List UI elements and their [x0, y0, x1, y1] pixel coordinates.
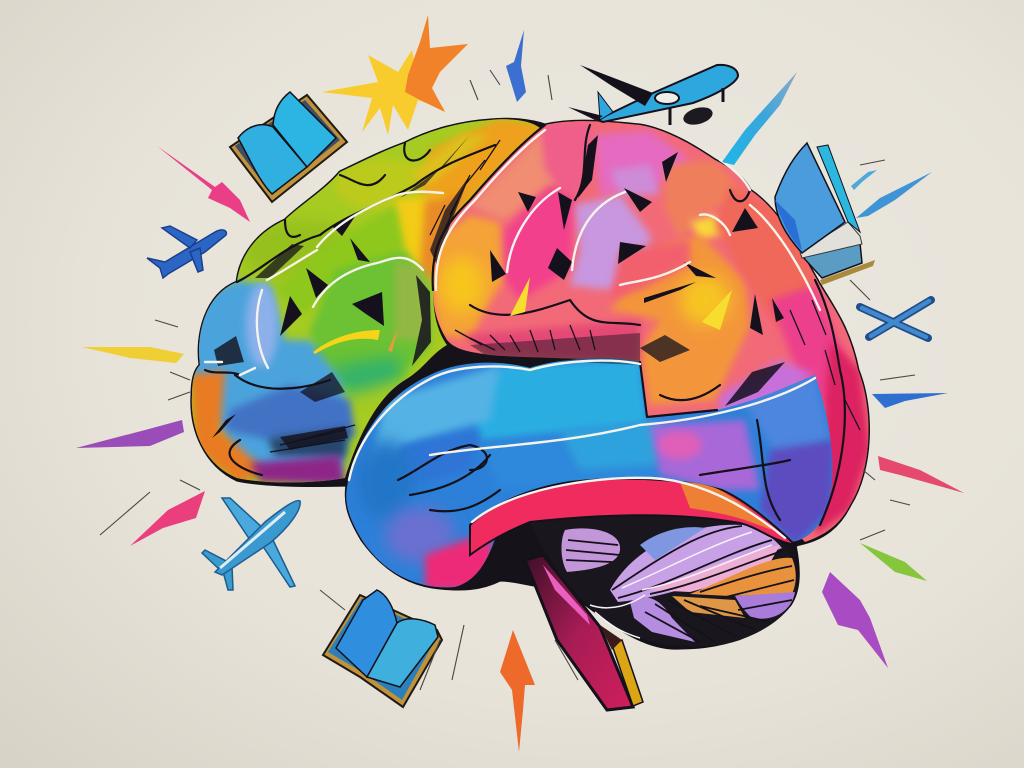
- brush mark: orange bottom: [500, 630, 535, 752]
- white highlight strokes: [205, 130, 820, 538]
- brush mark: yellow left: [82, 347, 184, 363]
- brush mark: green right: [860, 543, 927, 581]
- cerebellum: [530, 514, 797, 647]
- brush mark: blue small right: [851, 170, 877, 190]
- sketch lines around the brain: [100, 70, 915, 690]
- icon: airplane left: [147, 226, 226, 278]
- sulci: dark wedges: [212, 135, 785, 450]
- icon: airplane lower left: [202, 498, 300, 590]
- icon: open book top left: [230, 92, 347, 202]
- temporal lobe: blue and purple: [346, 358, 833, 588]
- icon: airplane right: [860, 300, 931, 338]
- brush mark: purple left: [76, 420, 184, 448]
- splash: yellow and orange burst: [322, 15, 468, 135]
- brain stem: [525, 555, 643, 710]
- main cortex: orange, pink and purple: [420, 110, 880, 550]
- brain silhouette: [192, 119, 868, 648]
- brain: [180, 100, 880, 710]
- brush mark: blue sky strokes: [722, 72, 797, 165]
- pink and orange band above cerebellum: [470, 479, 795, 555]
- accent marks: yellow: [510, 277, 732, 330]
- brush mark: blue right top: [856, 172, 932, 218]
- thin ink contour lines: [205, 125, 845, 525]
- brush mark: blue right: [872, 393, 948, 408]
- left frontal lobe: green, yellow and blue: [192, 119, 540, 482]
- brush mark: purple lower right: [822, 572, 888, 668]
- brush mark: pink right: [878, 456, 964, 493]
- hatching: [270, 140, 860, 452]
- icon: open book bottom left: [323, 590, 442, 707]
- brush mark: pink upper left: [157, 146, 250, 222]
- icon: airplane top: [568, 65, 738, 128]
- brush mark: blue top centre: [506, 30, 526, 102]
- icon: open book right: [775, 143, 875, 285]
- brush mark: pink lower left: [130, 491, 205, 546]
